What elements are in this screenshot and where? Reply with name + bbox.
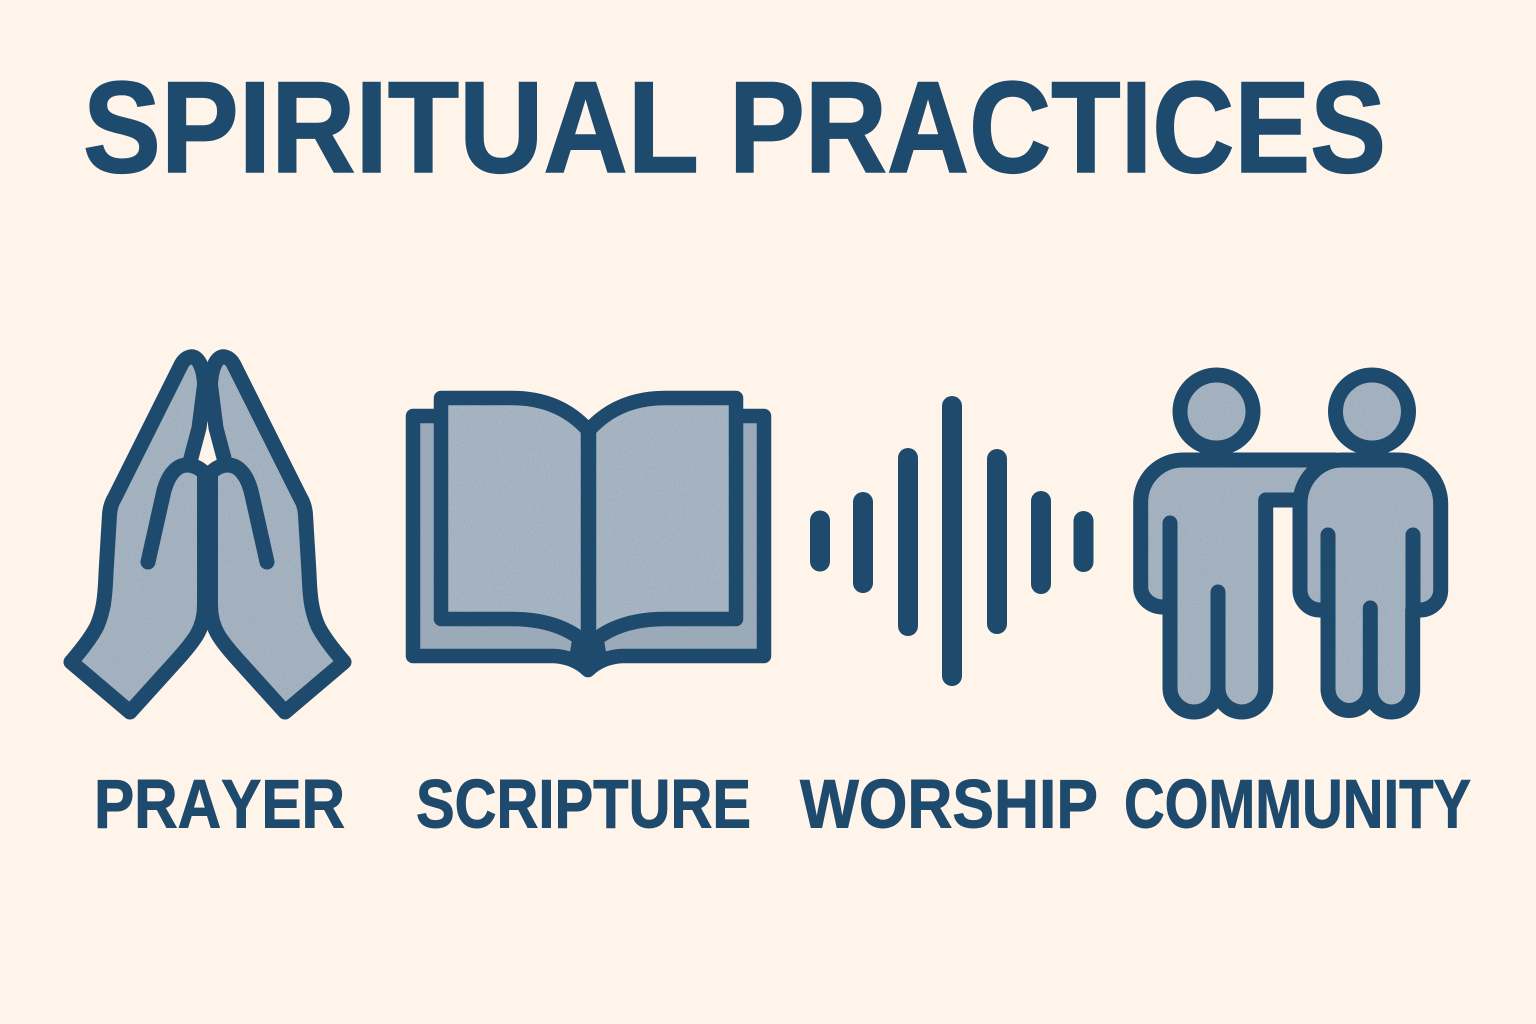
title: PRACTICES bbox=[729, 54, 1386, 200]
label: scripture: SCRIPTURE bbox=[416, 766, 751, 842]
icon: two people bbox=[1141, 375, 1441, 712]
label: prayer: PRAYER bbox=[94, 766, 345, 842]
icon: sound wave bbox=[810, 396, 1094, 686]
icon: praying hands bbox=[71, 357, 344, 712]
right page bbox=[589, 398, 736, 645]
person left bbox=[1141, 375, 1335, 712]
label: community: COMMUNITY bbox=[1124, 766, 1471, 842]
left page bbox=[441, 398, 588, 645]
right hand bbox=[208, 357, 344, 712]
title: SPIRITUAL bbox=[83, 54, 699, 200]
icon: open book bbox=[413, 398, 764, 672]
left hand bbox=[71, 357, 208, 712]
label: worship: WORSHIP bbox=[800, 766, 1098, 842]
back cover bbox=[413, 416, 764, 672]
person right bbox=[1300, 375, 1441, 712]
